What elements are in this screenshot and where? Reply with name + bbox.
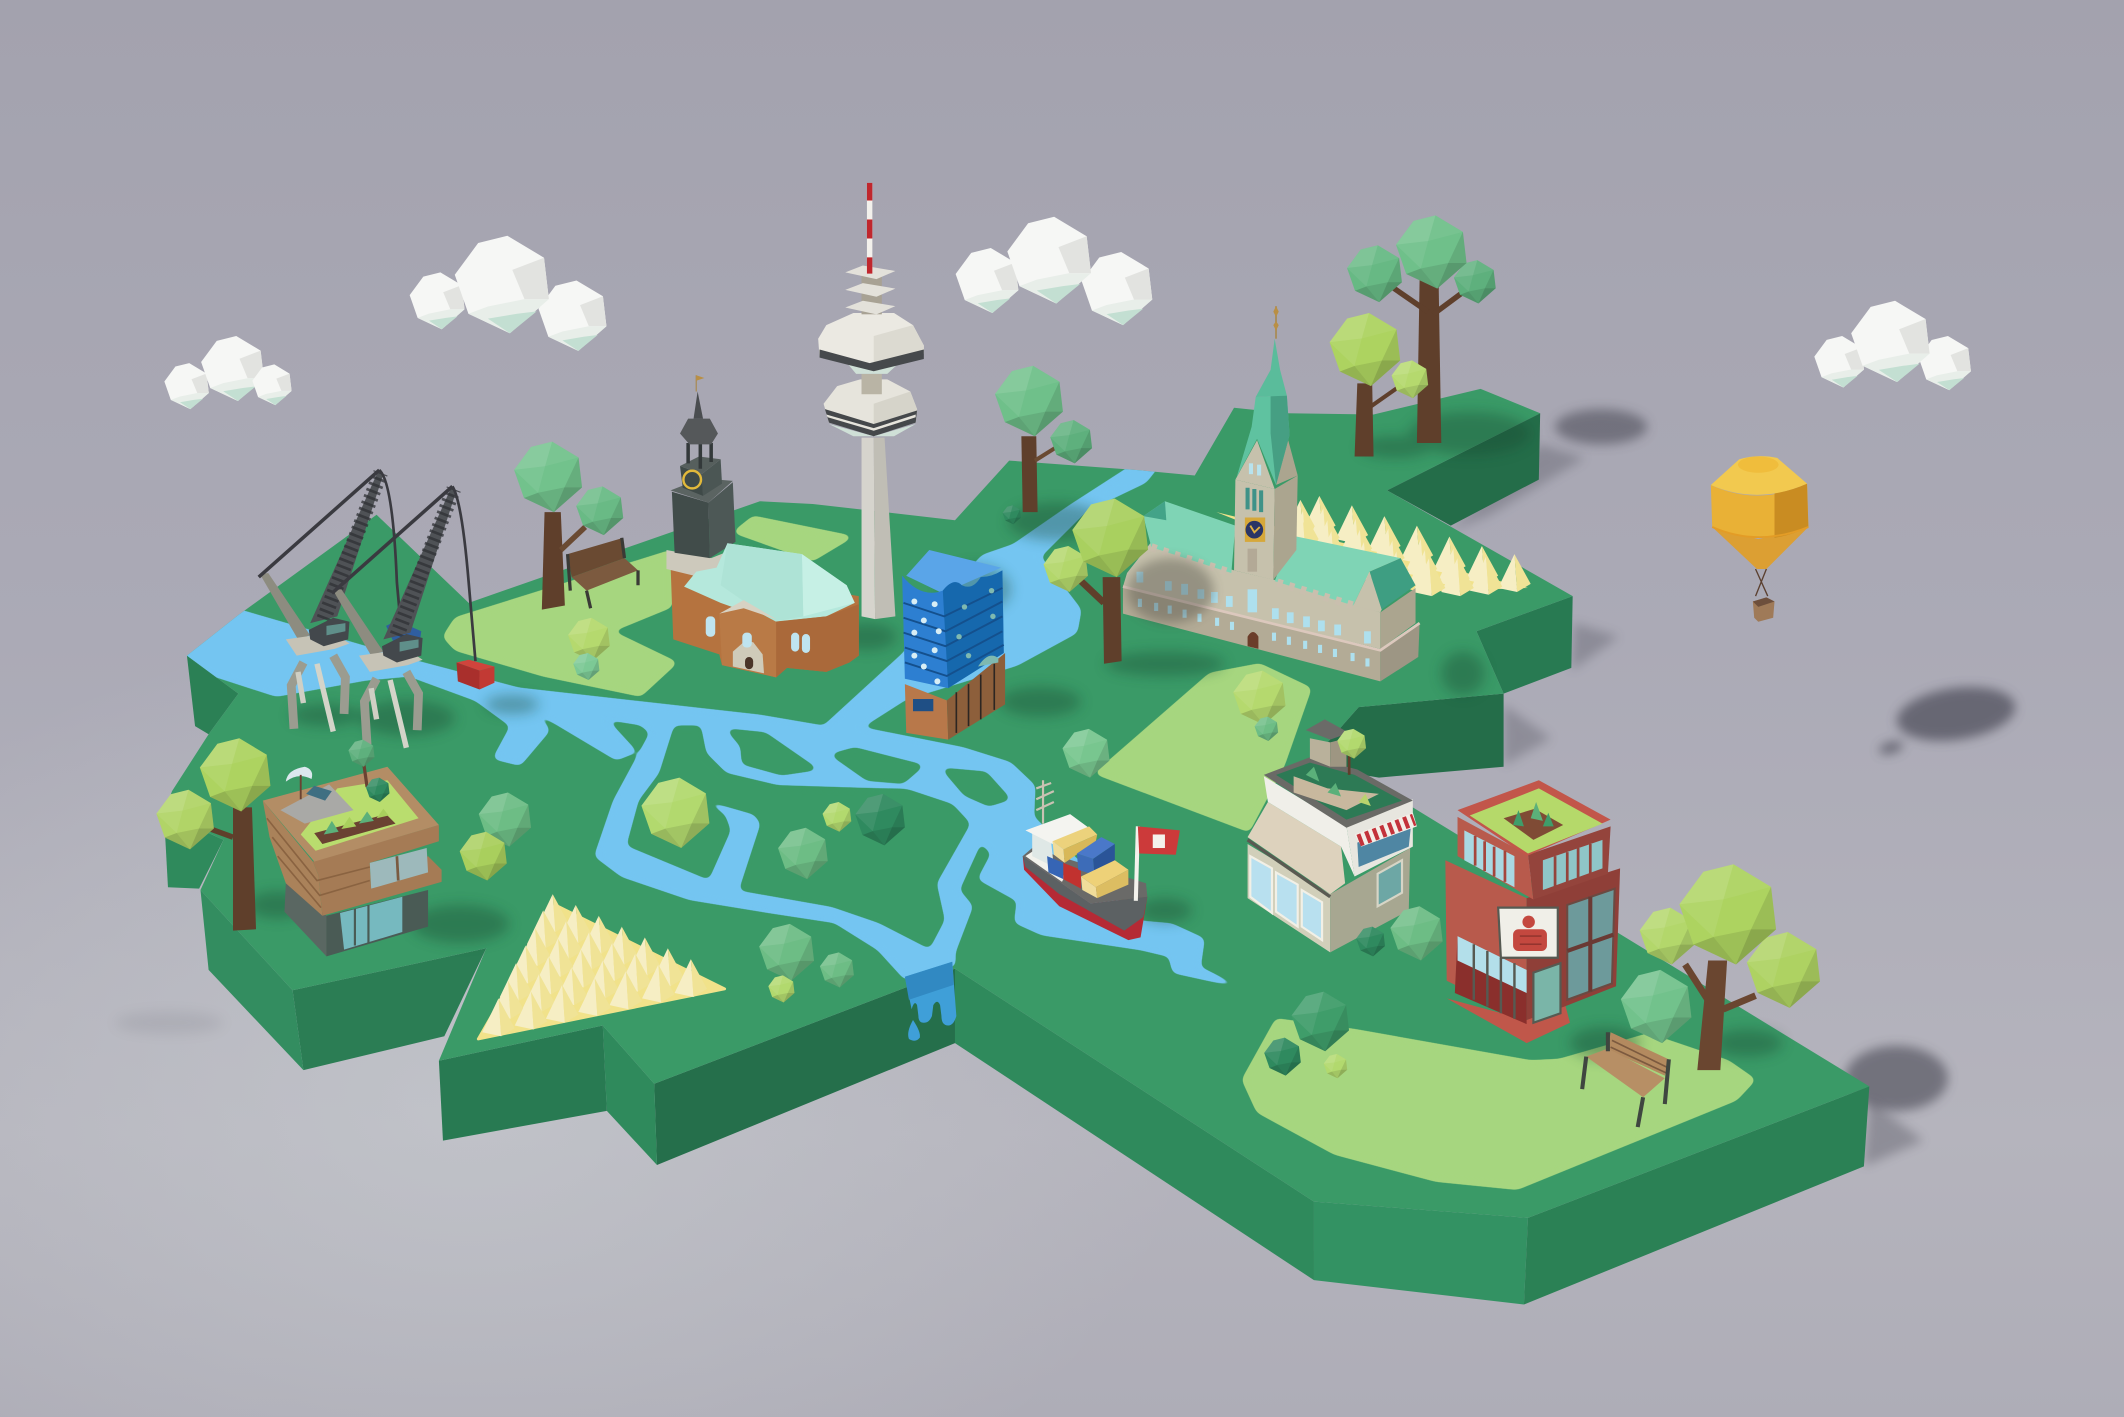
rooftop hut xyxy=(1310,738,1330,767)
TV tower xyxy=(818,183,924,619)
cranes xyxy=(259,470,475,748)
tree right xyxy=(1640,864,1820,1070)
meadow patches xyxy=(443,516,1756,1189)
land shadows xyxy=(248,412,1783,1059)
clouds left small xyxy=(164,336,292,409)
red savings bank xyxy=(1445,780,1620,1043)
river islands xyxy=(627,726,1011,948)
hot air balloon xyxy=(1711,456,1808,622)
tree left xyxy=(156,738,270,931)
City Hall xyxy=(1123,306,1420,681)
rear trees xyxy=(1330,215,1496,457)
tree in front of hall xyxy=(1043,499,1148,664)
river network xyxy=(163,458,1241,988)
waterfall xyxy=(905,962,956,1041)
cargo ship xyxy=(1023,780,1180,940)
church St. Michaelis xyxy=(666,375,859,677)
land walls xyxy=(164,413,1869,1305)
parasol xyxy=(286,767,312,782)
bushes near church xyxy=(568,618,610,680)
Elbphilharmonie xyxy=(902,550,1005,740)
upper windows xyxy=(1464,830,1514,887)
tower clock xyxy=(1245,518,1265,542)
field back xyxy=(1216,496,1531,596)
Sparkasse sign xyxy=(1498,908,1558,958)
white house xyxy=(1248,719,1417,952)
cloud centre xyxy=(956,217,1152,325)
cloud right xyxy=(1814,301,1971,390)
bushes on centre meadow xyxy=(1062,671,1286,778)
tree behind river xyxy=(995,366,1092,524)
clock xyxy=(683,471,701,488)
bushes on lawn xyxy=(1264,970,1691,1078)
awning xyxy=(1355,813,1417,847)
bushes centre xyxy=(460,778,905,1002)
terrace house xyxy=(263,740,442,956)
tree with bench xyxy=(514,442,623,610)
bench right xyxy=(1582,1032,1669,1127)
bench left xyxy=(568,538,638,608)
roof terrace xyxy=(1264,757,1413,828)
red container xyxy=(456,660,494,690)
cloud upper left xyxy=(410,236,606,351)
Hamburg flag xyxy=(1138,826,1180,855)
floor shadows xyxy=(115,409,2019,1166)
land top surface xyxy=(164,389,1869,1218)
shop front xyxy=(1455,936,1527,1024)
roof beds xyxy=(314,814,396,844)
tall windows xyxy=(1567,889,1615,1000)
field front xyxy=(478,894,725,1039)
bushes by house xyxy=(1356,906,1443,960)
